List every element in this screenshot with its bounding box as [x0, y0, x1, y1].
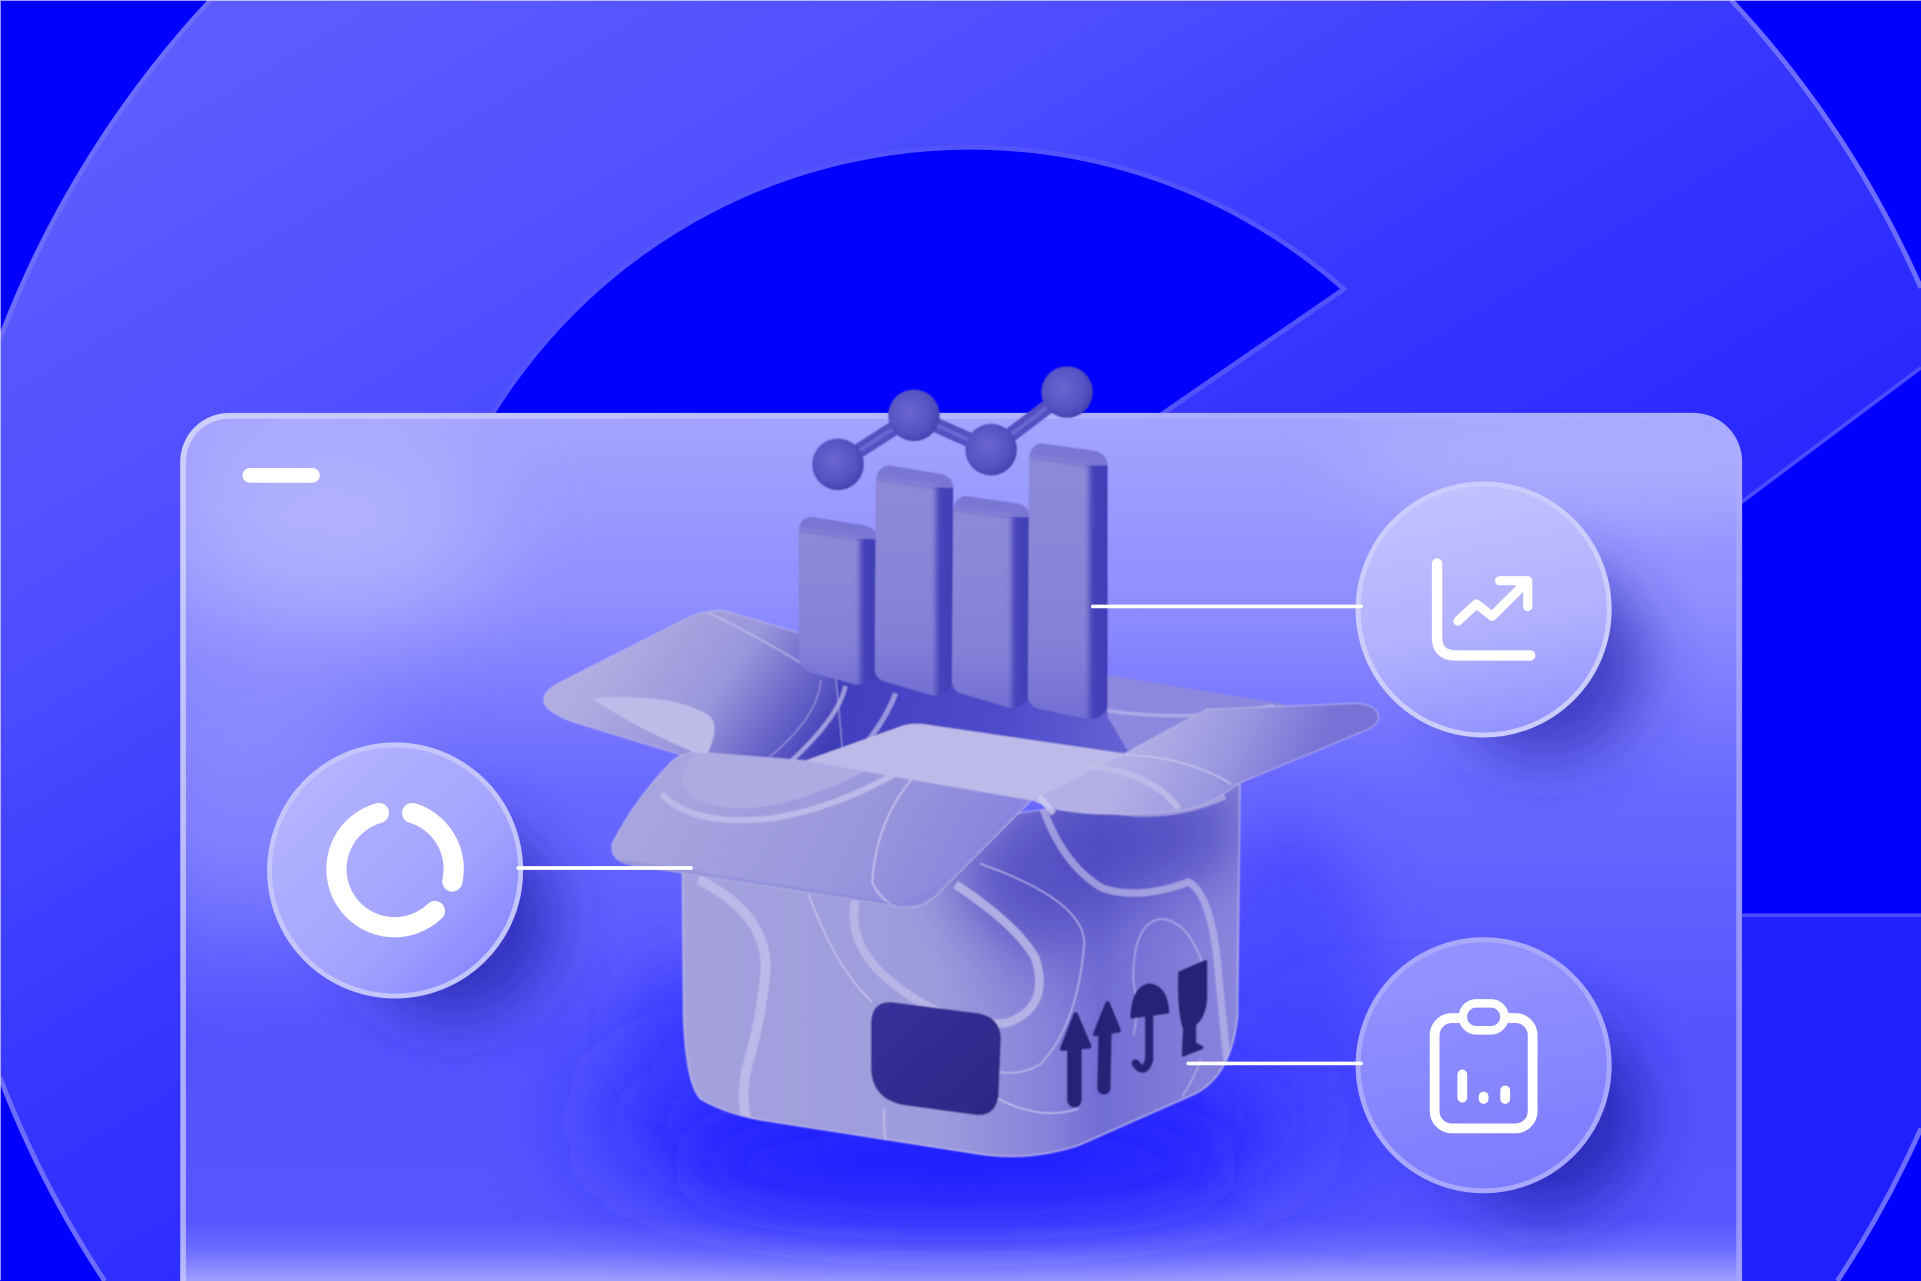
connector line: trend to bars [1093, 605, 1361, 608]
box interior [723, 662, 1286, 766]
connector line: clipboard to box [1188, 1062, 1361, 1065]
card header bar [243, 468, 320, 483]
box body [682, 784, 1240, 1156]
inner circle cutout [453, 147, 1344, 490]
back right flap [1108, 675, 1286, 750]
shipping label [871, 1002, 1001, 1115]
bar 3 [951, 496, 1030, 708]
interior contour lines [769, 680, 896, 762]
bar 1 [798, 516, 876, 686]
right sector cutout [1715, 368, 1921, 915]
connector line: donut to box [518, 867, 691, 870]
glass card panel [180, 412, 1742, 1281]
light top panel [805, 724, 1125, 800]
badge: clipboard [1358, 940, 1609, 1191]
handling symbols [1062, 962, 1206, 1100]
badge: trend chart [1358, 484, 1609, 735]
icon: clipboard [1435, 1003, 1533, 1128]
bar 2 [874, 465, 954, 696]
3D box with chart [544, 366, 1379, 1156]
icon: donut [336, 813, 454, 927]
badge: donut chart [270, 745, 521, 996]
front right flap [1032, 703, 1379, 814]
bar 4 [1027, 443, 1108, 719]
line chart balls [812, 366, 1093, 490]
front left flap [612, 752, 1032, 909]
icon: trend chart [1437, 564, 1530, 655]
back left flap [544, 610, 845, 784]
